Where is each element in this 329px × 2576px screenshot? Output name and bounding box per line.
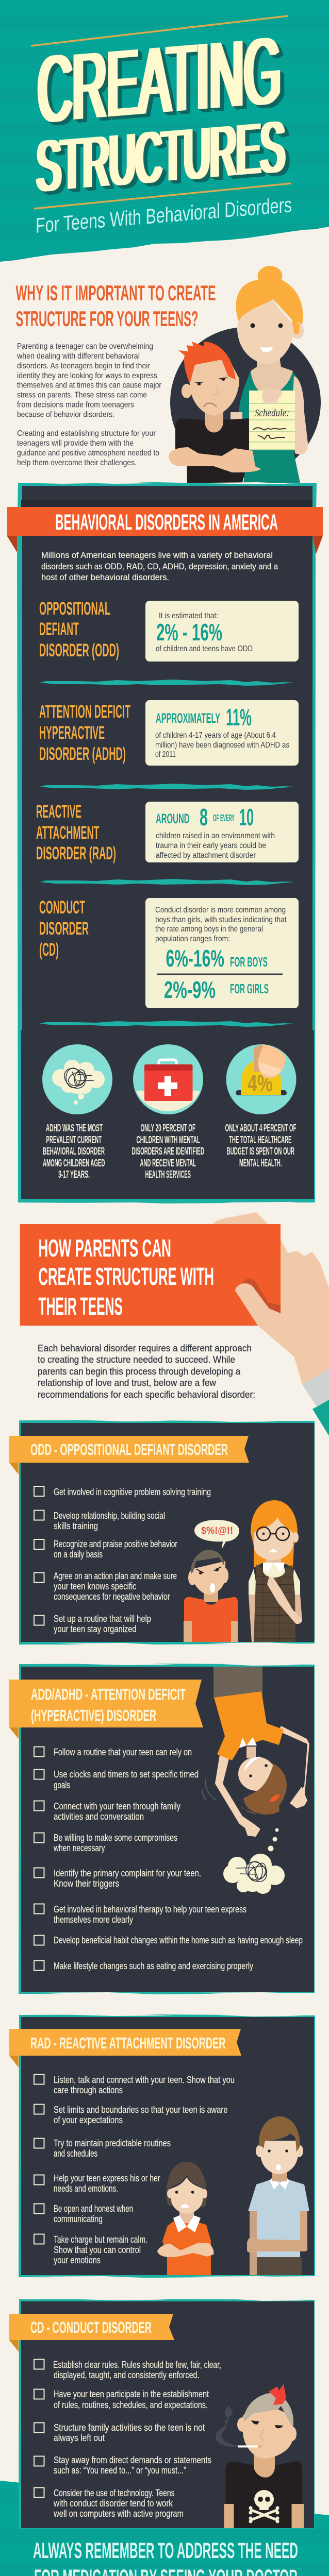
stat card: ODD: of children and teens have ODD	[156, 645, 253, 653]
stat card: ODD: 2% - 16%	[156, 619, 222, 646]
checklist: ODD: your teen knows specific	[54, 1581, 136, 1591]
illustration: smoking punk teen	[216, 2384, 304, 2528]
panel intro text: disorders such as ODD, RAD, CD, ADHD, depression, anxiety and a	[41, 562, 278, 571]
checklist: ODD: Develop relationship, building social	[54, 1511, 165, 1521]
ribbon heading	[7, 507, 323, 554]
checklist: ADHD: Get involved in behavioral therapy to help your teen express	[54, 1904, 246, 1914]
checklist: ADHD: Identify the primary complaint for your teen.	[54, 1868, 201, 1878]
label: ODD: DEFIANT	[39, 619, 79, 639]
checklist: ODD: Set up a routine that will help	[54, 1614, 151, 1624]
stat card: RAD: OF EVERY	[213, 813, 235, 823]
checklist: CD: displayed, taught, and consistently enforced.	[54, 2370, 199, 2380]
checklist: RAD: Help your teen express his or her	[54, 2173, 160, 2183]
caption: 20 percent: ONLY 20 PERCENT OF	[140, 1123, 195, 1134]
label: ODD: DISORDER (ODD)	[39, 640, 119, 660]
caption: 20 percent: AND RECEIVE MENTAL	[140, 1158, 196, 1169]
label: RAD	[36, 802, 116, 863]
checklist: ADHD: Know their triggers	[54, 1878, 119, 1889]
checklist: RAD: Try to maintain predictable routines	[54, 2138, 171, 2148]
checklist: ODD: on a daily basis	[54, 1549, 103, 1560]
text block: how parents intro: relationship of love and trust, below are a few	[38, 1378, 217, 1388]
icon: tangled thought	[42, 1044, 112, 1114]
illustration: teen with crossed arms	[157, 2162, 214, 2275]
illustration: angry boy	[184, 1550, 238, 1642]
caption: ADHD prevalence: PREVALENT CURRENT	[46, 1134, 102, 1146]
illustration: father	[247, 2116, 309, 2275]
caption: 20 percent	[132, 1123, 204, 1180]
checklist: RAD: of your expectations	[54, 2115, 123, 2125]
text block: intro paragraphs: when dealing with different behavioral	[17, 352, 140, 361]
stat card: CD: FOR GIRLS	[230, 981, 269, 996]
label: RAD: ATTACHMENT	[36, 823, 99, 843]
label: ODD: OPPOSITIONAL	[39, 599, 110, 619]
stat card: ADHD: of children 4-17 years of age (About 6.4	[155, 731, 276, 740]
panel: ODD recommendations	[9, 1420, 315, 1645]
label: CD: DISORDER	[39, 919, 89, 939]
label: ODD	[39, 599, 119, 660]
illustration: mother and son	[169, 266, 321, 483]
text block: intro paragraphs	[17, 342, 162, 467]
schedule note: Schedule:	[255, 408, 289, 419]
ribbon: ADHD	[9, 1680, 203, 1739]
text block: how parents intro: parents can begin this process through developing a	[38, 1366, 241, 1377]
checklist: ODD	[34, 1486, 211, 1634]
illustration: angry girl	[249, 1500, 302, 1642]
panel: ADHD recommendations	[9, 1664, 315, 1994]
checklist: ADHD: Make lifestyle changes such as eating and exercising properly	[54, 1961, 253, 1971]
panel: RAD recommendations	[9, 2014, 315, 2278]
checklist: RAD: care through actions	[54, 2085, 123, 2095]
text block: intro paragraphs: stress on parents. These stress can come	[17, 391, 147, 400]
stat card: ADHD: of 2011	[155, 750, 176, 759]
ribbon: ODD	[9, 1436, 249, 1475]
caption: 20 percent: CHILDREN WITH MENTAL	[136, 1134, 200, 1146]
heading block: how parents can create structure	[20, 1224, 281, 1326]
label: CD: (CD)	[39, 940, 59, 960]
text block: intro paragraphs: from decisions made from teenagers	[17, 401, 134, 409]
heading block: how parents can create structure: THEIR TEENS	[38, 1293, 123, 1320]
stat card: CD	[145, 898, 299, 1008]
checklist: ODD: Get involved in cognitive problem solving training	[54, 1487, 211, 1497]
stat card: RAD: affected by attachment disorder	[156, 851, 256, 860]
checklist: RAD: communicating	[54, 2214, 103, 2224]
checklist: CD: Have your teen participate in the establishment	[54, 2389, 209, 2399]
stat card: ODD: It is estimated that:	[159, 612, 218, 620]
ribbon: ADHD: ADD/ADHD - ATTENTION DEFICIT	[31, 1685, 186, 1703]
checklist: CD: well on computers with active program	[53, 2509, 184, 2519]
footer teal background	[0, 2481, 329, 2576]
checklist: ODD: Recognize and praise positive behavior	[54, 1539, 177, 1549]
label: ADHD	[39, 702, 130, 764]
icon: first aid kit	[133, 1044, 203, 1114]
checklist: CD: Consider the use of technology. Teens	[54, 2488, 174, 2498]
icon: coin 4 percent: 4%	[248, 1070, 273, 1096]
icon: coin 4 percent	[226, 1044, 296, 1114]
checklist: RAD: needs and emotions.	[54, 2183, 118, 2194]
panel intro text: host of other behavioral disorders.	[41, 572, 169, 582]
callout: see your doctor	[33, 2538, 298, 2576]
text block: intro paragraphs: guidance and positive atmosphere needed to	[17, 449, 159, 457]
text block: intro paragraphs: because of behavior disorders.	[17, 410, 114, 419]
stat card: CD: 2%-9%	[164, 976, 216, 1003]
checklist: RAD: your emotions	[54, 2255, 101, 2265]
son	[169, 342, 261, 483]
ribbon: CD: CD - CONDUCT DISORDER	[30, 2318, 152, 2336]
stat card: ADHD	[145, 700, 299, 766]
checklist: ADHD: activities and conversation	[54, 1811, 144, 1822]
ribbon: RAD	[9, 2029, 241, 2067]
mother	[231, 266, 308, 483]
heading: why important	[15, 281, 216, 331]
checklist: CD: Structure family activities so the teen is not	[54, 2422, 205, 2433]
stat card: RAD: children raised in an environment with	[156, 832, 275, 840]
ribbon: ADHD: (HYPERACTIVE) DISORDER	[31, 1706, 156, 1724]
checklist: RAD: Show that you can control	[54, 2245, 141, 2255]
stat card: RAD: 8	[200, 804, 208, 831]
panel intro text: Millions of American teenagers live with a variety of behavioral	[41, 550, 273, 560]
speech bubble	[194, 1520, 239, 1549]
caption: 4 percent	[225, 1123, 296, 1169]
stat card: ADHD: APPROXIMATELY	[156, 710, 220, 726]
caption: 20 percent: HEALTH SERVICES	[145, 1169, 191, 1180]
ribbon: CD	[9, 2314, 174, 2352]
panel: behavioral disorders in America: DISORDERS ARE IDENTIFIED	[132, 1146, 204, 1157]
checklist: ODD: your teen stay organized	[54, 1624, 136, 1634]
checklist: ODD: skills training	[54, 1521, 98, 1531]
stat card: RAD: 10	[239, 804, 254, 831]
text block: how parents intro	[38, 1343, 255, 1400]
stat card: CD: the rate among boys in the general	[155, 925, 263, 934]
text block: intro paragraphs: Creating and establishing structure for your	[17, 429, 156, 438]
checklist: ADHD	[34, 1747, 303, 1971]
heading block: how parents can create structure: HOW PARENTS CAN	[38, 1235, 171, 1262]
header band	[0, 0, 329, 262]
stat card: CD: FOR BOYS	[230, 954, 268, 970]
stat card: ADHD: million) have been diagnosed with ADHD as	[155, 741, 289, 750]
title rule bottom	[34, 183, 291, 209]
stat card: RAD: trauma in their early years could be	[156, 841, 266, 850]
checklist: CD: Stay away from direct demands or statements	[54, 2455, 211, 2465]
label: RAD: REACTIVE	[36, 802, 81, 822]
title	[31, 16, 292, 238]
text block: intro paragraphs: identity they are looking for ways to express	[17, 371, 157, 380]
checklist: CD: of rules, routines, schedules, and expectations.	[54, 2400, 208, 2410]
checklist: ADHD: Follow a routine that your teen can rely on	[54, 1747, 192, 1757]
checklist: ODD: consequences for negative behavior	[54, 1591, 170, 1602]
panel: behavioral disorders in America	[7, 482, 323, 1204]
stat card: ODD	[145, 601, 299, 662]
caption: ADHD prevalence: ADHD WAS THE MOST	[46, 1123, 103, 1134]
speech bubble: $%!@!!	[201, 1526, 233, 1536]
illustration: upside down girl	[202, 1667, 309, 1894]
schedule note	[249, 388, 295, 450]
stat card: ADHD: 11%	[226, 704, 252, 731]
caption: ADHD prevalence	[43, 1123, 105, 1180]
checklist: ADHD: goals	[54, 1780, 70, 1790]
dark circle backdrop	[170, 327, 321, 478]
checklist: RAD: and schedules	[54, 2148, 97, 2159]
checklist: RAD: Listen, talk and connect with your teen. Show that you	[54, 2075, 235, 2085]
checklist: RAD: Set limits and boundaries so that your teen is aware	[54, 2105, 228, 2115]
text block: intro paragraphs: teenagers will provide them with the	[17, 439, 134, 448]
checklist: CD: with conduct disorder tend to work	[53, 2498, 173, 2509]
text block: intro paragraphs: disorders. As teenagers begin to find their	[17, 362, 151, 370]
label: CD: CONDUCT	[39, 897, 85, 918]
checklist: CD: always left out	[54, 2433, 105, 2443]
checklist: CD	[34, 2360, 221, 2519]
text block: intro paragraphs: themselves and at times this can cause major	[17, 381, 162, 389]
label: CD	[39, 897, 89, 960]
stat card: RAD: AROUND	[156, 811, 190, 826]
stat card: CD: boys than girls, with studies indicating that	[155, 916, 287, 924]
checklist: RAD: Be open and honest when	[54, 2204, 133, 2214]
panel intro text	[41, 550, 278, 582]
text block: intro paragraphs: Parenting a teenager can be overwhelming	[17, 342, 153, 351]
label: RAD: DISORDER (RAD)	[36, 843, 116, 863]
checklist: ADHD: when necessary	[53, 1843, 105, 1853]
stat card: CD: 6%-16%	[166, 945, 224, 972]
text block: intro paragraphs: help them overcome their challenges.	[17, 459, 137, 467]
text block: how parents intro: to creating the structure needed to succeed. While	[38, 1354, 235, 1365]
caption: 4 percent: MENTAL HEALTH.	[239, 1158, 282, 1169]
checklist: CD: such as: “You need to...” or “you must...”	[54, 2465, 186, 2476]
checklist: ADHD: Connect with your teen through family	[54, 1801, 180, 1811]
checklist: RAD: Take charge but remain calm.	[54, 2234, 147, 2245]
checklist: ODD: Agree on an action plan and make sure	[54, 1571, 177, 1581]
checklist: RAD	[34, 2074, 235, 2265]
title rule top	[31, 16, 288, 46]
stat card: CD: population ranges from:	[155, 935, 230, 943]
text block: how parents intro: recommendations for each specific behavioral disorder:	[38, 1389, 255, 1400]
panel: behavioral disorders in America: BEHAVIORAL DISORDER	[43, 1146, 105, 1157]
checklist: ADHD: Use clocks and timers to set specific timed	[54, 1769, 199, 1780]
label: ADHD: HYPERACTIVE	[39, 723, 105, 743]
caption: ADHD prevalence: 3-17 YEARS.	[58, 1169, 90, 1180]
label: ADHD: DISORDER (ADHD)	[39, 744, 126, 764]
panel: CD recommendations	[9, 2299, 315, 2529]
stat card: RAD	[145, 802, 299, 862]
checklist: ADHD: Be willing to make some compromises	[54, 1833, 177, 1843]
text block: how parents intro: Each behavioral disorder requires a different approach	[38, 1343, 252, 1353]
illustration: pointing hand	[213, 1212, 329, 1436]
checklist: ADHD: themselves more clearly	[54, 1914, 133, 1925]
label: ADHD: ATTENTION DEFICIT	[39, 702, 130, 722]
panel: behavioral disorders in America: AMONG CHILDREN AGED	[43, 1158, 105, 1169]
stat card: CD: Conduct disorder is more common among	[155, 906, 286, 914]
checklist: CD: Establish clear rules. Rules should be few, fair, clear,	[53, 2360, 221, 2370]
